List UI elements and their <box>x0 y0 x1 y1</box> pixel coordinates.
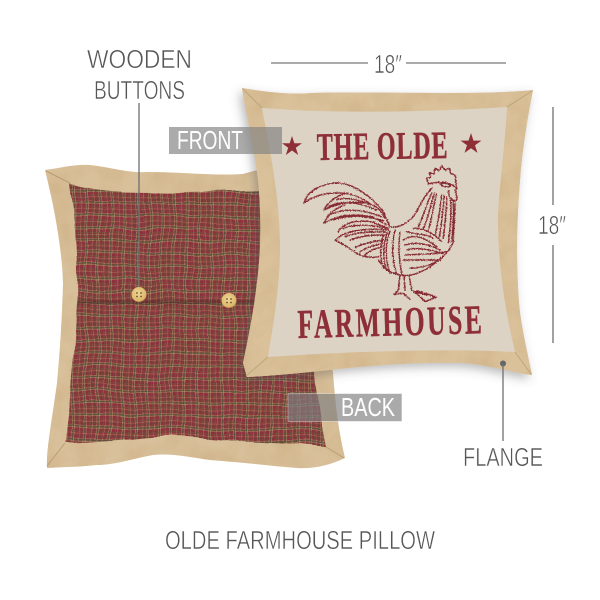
label: back: BACK <box>341 392 395 422</box>
rooster neck <box>418 193 454 243</box>
star left <box>282 136 302 155</box>
label: wooden buttons: BUTTONS <box>94 75 185 105</box>
label: front: FRONT <box>177 125 243 155</box>
wooden button left <box>132 287 146 302</box>
leader line: wooden buttons <box>138 103 140 287</box>
label: wooden buttons: WOODEN <box>87 44 192 74</box>
title: OLDE FARMHOUSE PILLOW <box>165 525 435 555</box>
wooden button right <box>222 293 236 308</box>
panel: back pillow <box>45 165 345 468</box>
callout: flange <box>463 360 543 472</box>
front pillow flange <box>242 88 533 377</box>
rooster tail feathers <box>304 183 389 257</box>
back pillow flap crease <box>77 299 267 305</box>
rooster legs <box>394 275 436 302</box>
callout: flange: FLANGE <box>463 442 543 472</box>
heading: farmhouse: FARMHOUSE <box>297 298 482 348</box>
front pillow flange texture <box>242 88 533 377</box>
panel: front pillow <box>242 88 533 377</box>
star right <box>461 133 481 153</box>
label: back <box>288 392 402 422</box>
label: wooden buttons <box>87 44 192 105</box>
rooster head and comb <box>427 166 457 201</box>
heading: the olde: THE OLDE <box>316 124 448 170</box>
front pillow cream panel <box>262 107 515 357</box>
dimension: height 18 inches: 18″ <box>538 210 566 240</box>
back pillow flange <box>45 165 345 468</box>
rooster body and wing <box>378 188 455 275</box>
rooster illustration <box>304 166 457 302</box>
dimension: width 18 inches: 18″ <box>374 49 402 79</box>
back pillow plaid fabric <box>65 183 326 447</box>
back pillow corner seams <box>46 171 344 466</box>
front pillow corner seams <box>243 89 532 376</box>
